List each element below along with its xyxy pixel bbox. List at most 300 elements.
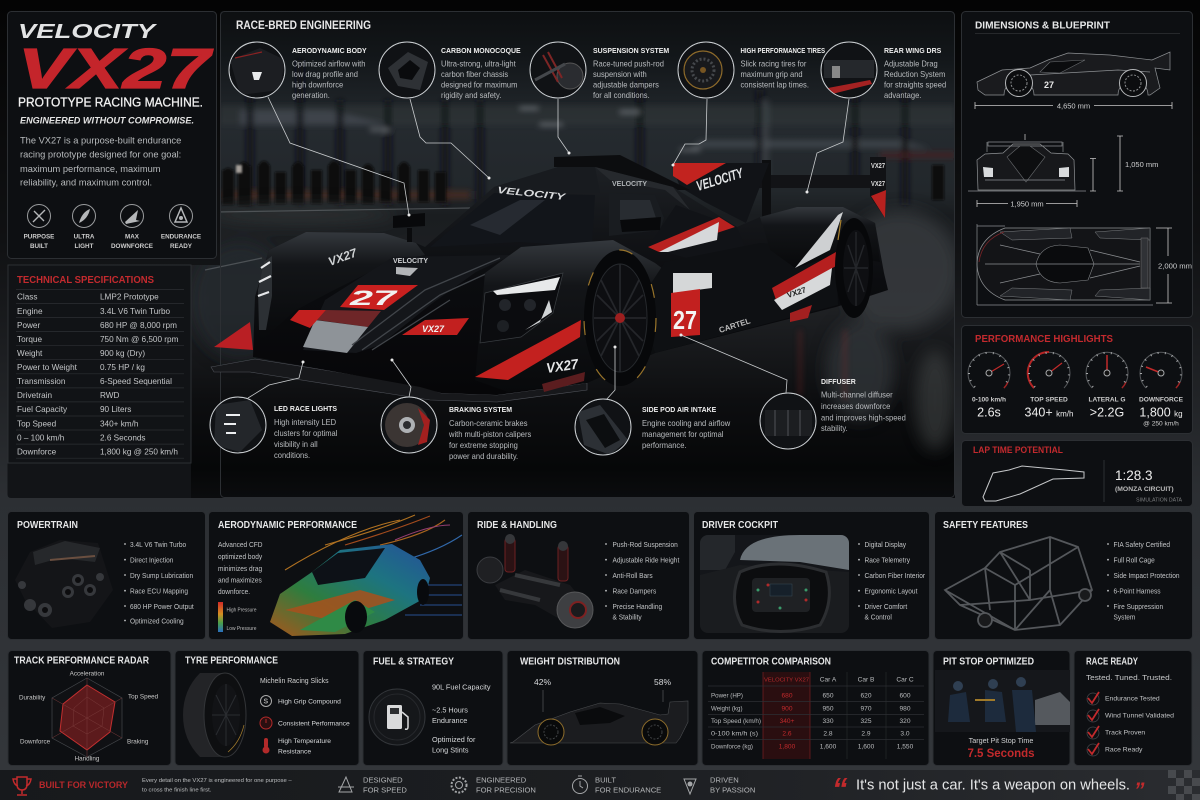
panel: driver cockpit	[694, 512, 930, 640]
radar chart: Acceleration	[70, 670, 105, 678]
spec table: RWD	[100, 391, 119, 400]
driven by passion	[684, 776, 755, 794]
comparison table: Downforce (kg)	[711, 744, 753, 750]
spec table: LMP2 Prototype	[100, 293, 159, 302]
description: maximum performance, maximum	[20, 164, 161, 174]
spec table: Power	[17, 321, 40, 330]
front red stripe	[475, 320, 581, 380]
comparison table: 330	[822, 718, 834, 725]
race car illustration: 27	[673, 305, 697, 335]
callout: carbon monocoque	[379, 42, 521, 100]
callout: high performance tires: consistent lap times.	[740, 80, 809, 90]
gauge: downforce: @ 250 km/h	[1143, 420, 1179, 428]
spec table: 1,800 kg @ 250 km/h	[100, 448, 178, 456]
spec table: Top Speed	[17, 419, 57, 428]
blueprint: side view: 27	[1044, 80, 1054, 90]
radar chart	[19, 670, 159, 762]
description: downforce.	[218, 589, 250, 596]
race car illustration: VELOCITY	[393, 258, 428, 265]
cockpit illustration	[700, 535, 849, 633]
spec table: 900 kg (Dry)	[100, 349, 145, 358]
icon: monocoque thumbnail	[379, 42, 435, 98]
subtitle: ENGINEERED WITHOUT COMPROMISE.	[20, 116, 194, 126]
checklist	[1087, 692, 1174, 756]
panel: driver cockpit: Digital Display	[864, 542, 907, 549]
race car illustration: VX27	[871, 163, 885, 170]
gauge: top speed: 340+ km/h	[1025, 406, 1073, 420]
tyre features	[260, 678, 350, 756]
built for endurance: FOR ENDURANCE	[595, 786, 661, 794]
callout: high performance tires: maximum grip and	[740, 70, 803, 79]
description: minimizes drag	[218, 566, 262, 573]
callout: braking system: Carbon-ceramic brakes	[449, 419, 528, 428]
gauge: top speed: TOP SPEED	[1030, 396, 1068, 404]
callout: suspension system: adjustable dampers	[593, 80, 659, 90]
race car illustration: VX27	[326, 245, 360, 269]
lap time: 1:28.3	[1115, 468, 1153, 483]
callout: carbon monocoque: rigidity and safety.	[441, 91, 501, 100]
front weight	[534, 677, 551, 712]
footer statement: Every detail on the VX27 is engineered for one purpose –	[142, 778, 292, 784]
built for endurance: BUILT	[595, 776, 616, 784]
race car illustration: VX27	[545, 356, 580, 376]
engineered for precision	[452, 776, 536, 794]
dimension: height	[1090, 136, 1158, 191]
comparison table: 340+	[780, 718, 795, 725]
callout: rear wing DRS	[821, 42, 946, 100]
panel: safety features: FIA Safety Certified	[1114, 542, 1170, 549]
rear weight	[654, 677, 671, 702]
callout: braking system	[381, 397, 531, 461]
footer bar	[0, 770, 1200, 800]
callout: side pod air intake: performance.	[642, 441, 687, 450]
panel: ride and handling: Precise Handling	[612, 604, 662, 611]
footer statement: to cross the finish line first.	[142, 788, 212, 794]
spec table: 0.75 HP / kg	[100, 363, 145, 372]
race car illustration: VX27	[422, 324, 445, 334]
callout: suspension system	[530, 42, 669, 100]
race car illustration: CARTEL	[718, 316, 752, 335]
built for endurance	[572, 776, 661, 794]
spec table: Class	[17, 293, 37, 302]
spec table: 750 Nm @ 6,500 rpm	[100, 335, 179, 344]
pit stop target: Target Pit Stop Time	[969, 736, 1033, 745]
comparison table: 1,550	[897, 744, 914, 750]
heading: SAFETY FEATURES	[943, 519, 1028, 531]
spec table: Downforce	[17, 448, 57, 456]
comparison table: Car B	[858, 676, 875, 684]
heading: COMPETITOR COMPARISON	[711, 656, 831, 668]
callout: diffuser	[760, 377, 906, 449]
spec table: 340+ km/h	[100, 419, 139, 428]
panel: track performance radar	[8, 650, 171, 766]
icon: purpose built	[24, 204, 54, 250]
callout: diffuser: DIFFUSER	[821, 377, 856, 386]
fuel text: ~2.5 Hours	[432, 706, 468, 714]
built for victory: BUILT FOR VICTORY	[39, 780, 129, 791]
comparison table: VELOCITY VX27	[764, 678, 809, 684]
front fender and side body	[475, 240, 687, 392]
model name: VX27	[18, 37, 213, 101]
comparison table: Car C	[896, 676, 914, 684]
callout: carbon monocoque: designed for maximum	[441, 80, 518, 90]
description	[20, 136, 181, 188]
rear wheel	[835, 218, 873, 318]
comparison table: 950	[822, 706, 834, 712]
roll cage illustration	[945, 537, 1092, 630]
comparison table: 970	[860, 706, 872, 712]
panel: driver cockpit: & Control	[864, 614, 892, 622]
heading: AERODYNAMIC PERFORMANCE	[218, 519, 357, 531]
rear wing	[751, 175, 870, 188]
checklist: Wind Tunnel Validated	[1105, 712, 1174, 720]
panel: ride and handling	[468, 512, 690, 640]
icon: trophy	[13, 777, 31, 795]
callout: aerodynamic body: Optimized airflow with	[292, 59, 365, 69]
race car illustration: VELOCITY	[612, 181, 647, 188]
track map	[983, 466, 1084, 501]
rear weight: 58%	[654, 677, 671, 687]
comparison table: Power (HP)	[711, 692, 743, 700]
brand name: VELOCITY	[18, 20, 158, 43]
quote	[832, 771, 1145, 800]
comparison table: 680	[781, 692, 793, 700]
heading: WEIGHT DISTRIBUTION	[520, 656, 620, 668]
lap time	[1115, 468, 1183, 504]
callout: braking system: for extreme stopping	[449, 441, 518, 450]
pit stop target: 7.5 Seconds	[967, 748, 1035, 760]
icon: purpose built: PURPOSE	[24, 234, 54, 240]
radar chart: Durability	[19, 694, 46, 702]
icon: max downforce: MAX	[125, 234, 140, 240]
callout: side pod air intake: management for optimal	[642, 430, 724, 439]
callout: side pod air intake	[575, 399, 730, 455]
callout: aerodynamic body: AERODYNAMIC BODY	[292, 46, 367, 55]
panel: technical specifications	[8, 265, 191, 498]
panel: driver cockpit: Race Telemetry	[864, 557, 910, 565]
panel: competitor comparison	[702, 650, 929, 766]
panel: brand introduction	[8, 12, 216, 258]
callout: aerodynamic body: generation.	[292, 91, 330, 100]
heading: TYRE PERFORMANCE	[185, 654, 278, 666]
heading: FUEL & STRATEGY	[373, 656, 454, 668]
tagline: PROTOTYPE RACING MACHINE.	[18, 96, 203, 110]
icon: purpose built: BUILT	[30, 243, 48, 250]
designed for speed: DESIGNED	[363, 776, 403, 784]
panel: powertrain	[8, 512, 206, 640]
heading: LAP TIME POTENTIAL	[973, 445, 1063, 455]
icon: ultra light	[72, 204, 96, 250]
description: reliability, and maximum control.	[20, 178, 152, 188]
comparison table: 3.0	[900, 730, 910, 738]
panel: safety features: Full Roll Cage	[1114, 557, 1155, 565]
bullet list	[1107, 543, 1109, 607]
callout: diffuser: and improves high-speed	[821, 413, 906, 423]
callout: LED race lights: conditions.	[274, 451, 310, 460]
panel: pit stop optimized	[933, 650, 1070, 766]
description: racing prototype designed for one goal:	[20, 150, 181, 160]
tyre features: High Grip Compound	[278, 698, 341, 706]
spec table: Transmission	[17, 377, 66, 386]
dimension: length	[975, 102, 1172, 110]
gauge: 0-100	[968, 352, 1010, 420]
icon: suspension thumbnail	[530, 42, 586, 98]
comparison table: 1,600	[820, 744, 837, 750]
CFD car	[270, 544, 430, 636]
spec table: 0 – 100 km/h	[17, 433, 65, 442]
comparison table: Weight (kg)	[711, 706, 743, 712]
designed for speed	[338, 776, 407, 794]
panel: driver cockpit: Ergonomic Layout	[864, 588, 917, 596]
engine illustration	[15, 540, 113, 628]
description: The VX27 is a purpose-built endurance	[20, 136, 181, 146]
heading: PIT STOP OPTIMIZED	[943, 656, 1034, 668]
driven by passion: DRIVEN	[710, 776, 739, 784]
spec table: Fuel Capacity	[17, 405, 68, 414]
spec table: Drivetrain	[17, 391, 52, 400]
panel: safety features	[934, 512, 1192, 640]
section heading: RACE-BRED ENGINEERING	[236, 20, 371, 32]
callout: LED race lights: visibility in all	[274, 440, 318, 449]
gauge: lateral g	[1086, 352, 1128, 420]
side number panel	[673, 273, 712, 293]
spec table: 3.4L V6 Twin Turbo	[100, 307, 171, 316]
bullet list	[605, 543, 607, 607]
panel: fuel and strategy	[363, 650, 503, 766]
icon: endurance ready: READY	[170, 243, 193, 250]
panel: tyre performance	[175, 650, 359, 766]
callout: aerodynamic body: low drag profile and	[292, 70, 358, 79]
checklist: Track Proven	[1105, 730, 1145, 736]
race car illustration: VX27	[786, 285, 808, 300]
panel: race ready	[1074, 650, 1192, 766]
radar chart: Top Speed	[128, 694, 159, 700]
lap time: (MONZA CIRCUIT)	[1115, 486, 1174, 493]
heading: POWERTRAIN	[17, 519, 78, 531]
nose	[303, 255, 512, 353]
panel: driver cockpit: Driver Comfort	[864, 604, 907, 611]
panel: dimensions and blueprint	[962, 12, 1192, 318]
callout: diffuser: increases downforce	[821, 402, 891, 411]
tyre features: S	[264, 698, 268, 706]
icon: aero thumbnail	[229, 42, 285, 98]
icon: headlight thumbnail	[210, 397, 266, 453]
designed for speed: FOR SPEED	[363, 786, 407, 794]
race car illustration	[211, 155, 888, 402]
checklist: Endurance Tested	[1105, 696, 1160, 702]
car body	[253, 167, 888, 395]
heading: PERFORMANCE HIGHLIGHTS	[975, 333, 1113, 345]
panel: safety features: Side Impact Protection	[1114, 573, 1180, 580]
heading: DRIVER COCKPIT	[702, 519, 778, 531]
fuel text	[432, 682, 491, 754]
callout: rear wing DRS: advantage.	[884, 91, 921, 100]
spec table: Weight	[17, 349, 43, 358]
icon: tire thumbnail	[678, 42, 734, 98]
front wheel	[584, 250, 656, 386]
blueprint: top view	[977, 224, 1153, 305]
engineered for precision: ENGINEERED	[476, 776, 527, 784]
suspension illustration	[477, 534, 593, 628]
checklist: Race Ready	[1105, 746, 1143, 754]
dimension: depth: 2,000 mm	[1158, 262, 1192, 270]
comparison table: 2.9	[861, 730, 871, 738]
panel: powertrain: 680 HP Power Output	[130, 604, 194, 611]
spec table: Power to Weight	[17, 363, 78, 372]
quote: It's not just a car. It's a weapon on wheels.	[856, 778, 1130, 794]
callout: high performance tires: HIGH PERFORMANCE TIRES	[740, 46, 825, 55]
footer statement	[142, 778, 292, 794]
callout: diffuser: stability.	[821, 424, 848, 433]
gauge: 0-100: 2.6s	[977, 406, 1001, 420]
radar chart: Downforce	[20, 738, 51, 746]
icon: brake disc thumbnail	[381, 397, 437, 453]
callout: carbon monocoque: CARBON MONOCOQUE	[441, 46, 521, 55]
icon: endurance ready	[161, 204, 201, 250]
callout: suspension system: SUSPENSION SYSTEM	[593, 46, 669, 55]
spec table: 6-Speed Sequential	[100, 377, 172, 386]
panel: safety features: 6-Point Harness	[1114, 588, 1161, 596]
panel: ride and handling: & Stability	[612, 614, 642, 622]
radar chart: Braking	[127, 738, 149, 746]
spec table: 2.6 Seconds	[100, 433, 146, 442]
comparison table: 320	[899, 718, 911, 725]
airflow streaks	[285, 515, 462, 615]
panel: safety features: System	[1114, 614, 1136, 622]
leader lines	[248, 97, 849, 400]
lap time: SIMULATION DATA	[1136, 498, 1183, 504]
icon: fuel pump	[369, 689, 425, 745]
icon: max downforce	[111, 204, 153, 250]
dimension: length: 4,650 mm	[1057, 102, 1090, 110]
callout: high performance tires	[678, 42, 825, 98]
race car illustration: 27	[348, 287, 399, 310]
driven by passion: BY PASSION	[710, 786, 755, 794]
pit crew illustration	[935, 670, 1070, 732]
bullet list	[124, 543, 126, 621]
callout: rear wing DRS: Adjustable Drag	[884, 59, 938, 69]
dimension: width	[977, 200, 1077, 208]
panel: powertrain: Race ECU Mapping	[130, 588, 188, 596]
heading: RACE READY	[1086, 656, 1138, 668]
description: Advanced CFD	[218, 542, 263, 549]
panel: powertrain: 3.4L V6 Twin Turbo	[130, 542, 186, 549]
cabin stripe	[648, 217, 735, 252]
panel: powertrain: Direct Injection	[130, 557, 174, 565]
comparison table: 900	[781, 706, 793, 712]
callout: aerodynamic body	[229, 42, 367, 100]
spec table: Engine	[17, 307, 43, 316]
spec table	[16, 290, 184, 458]
front weight: 42%	[534, 677, 551, 687]
comparison table: Car A	[820, 676, 837, 684]
callout: high performance tires: Slick racing tires for	[740, 59, 807, 69]
race car illustration: VX27	[871, 181, 885, 188]
panel: driver cockpit: Carbon Fiber Interior	[864, 573, 926, 580]
panel: ride and handling: Adjustable Ride Height	[612, 557, 679, 565]
tyre illustration	[183, 673, 246, 757]
spec table: Torque	[17, 335, 42, 344]
icon: diffuser thumbnail	[760, 393, 816, 449]
gauge: downforce: 1,800 kg	[1139, 406, 1183, 420]
icon: ultra light: LIGHT	[75, 243, 94, 250]
tyre features: Resistance	[278, 748, 311, 756]
callout: LED race lights: LED RACE LIGHTS	[274, 404, 337, 413]
comparison table: 1,800	[779, 744, 796, 750]
comparison table: 0-100 km/h (s)	[711, 730, 758, 738]
panel: safety features: Fire Suppression	[1114, 604, 1163, 611]
pit stop target	[967, 736, 1035, 760]
callout: braking system: power and durability.	[449, 452, 518, 461]
callout: carbon monocoque: carbon fiber chassis	[441, 70, 508, 79]
panel: ride and handling: Push-Rod Suspension	[612, 542, 678, 549]
heading: RIDE & HANDLING	[477, 519, 557, 531]
icon: endurance ready: ENDURANCE	[161, 234, 201, 240]
panel: performance highlights	[962, 326, 1192, 434]
checker flag pattern	[1168, 770, 1200, 800]
icon: ultra light: ULTRA	[74, 234, 95, 240]
bullet list	[858, 543, 860, 607]
race car illustration: VELOCITY	[694, 164, 746, 194]
panel: ride and handling: Race Dampers	[612, 588, 657, 596]
fuel text: Long Stints	[432, 746, 469, 754]
strapline: Tested. Tuned. Trusted.	[1086, 673, 1172, 682]
blueprint: front view	[968, 134, 1086, 191]
dimension: depth	[1156, 228, 1192, 303]
pressure legend: Low Pressure	[226, 626, 257, 632]
comparison table: Top Speed (km/h)	[711, 718, 761, 725]
icon: rear wing thumbnail	[821, 42, 877, 98]
callout: suspension system: Race-tuned push-rod	[593, 59, 664, 69]
gauge: top speed	[1025, 352, 1073, 420]
callout: rear wing DRS: REAR WING DRS	[884, 46, 941, 55]
callout: diffuser: Multi-channel diffuser	[821, 390, 893, 400]
spec table: 680 HP @ 8,000 rpm	[100, 321, 177, 330]
description	[218, 542, 263, 596]
icon: side pod thumbnail	[575, 399, 631, 455]
callout: rear wing DRS: for straights speed	[884, 80, 946, 90]
car side view	[510, 701, 688, 745]
front wing	[214, 322, 253, 350]
panel: hero race-bred engineering	[190, 11, 960, 498]
callout: side pod air intake: SIDE POD AIR INTAKE	[642, 405, 716, 414]
fuel text: Endurance	[432, 716, 467, 725]
heading: TECHNICAL SPECIFICATIONS	[17, 274, 154, 286]
callout: braking system: BRAKING SYSTEM	[449, 405, 512, 414]
comparison table: 620	[860, 692, 872, 700]
comparison table: 325	[860, 718, 872, 725]
heading: DIMENSIONS & BLUEPRINT	[975, 20, 1111, 32]
panel: powertrain: Dry Sump Lubrication	[130, 573, 193, 580]
fuel text: 90L Fuel Capacity	[432, 682, 491, 692]
tyre features: High Temperature	[278, 738, 331, 745]
callout: LED race lights: High intensity LED	[274, 418, 336, 427]
gauge: 0-100: 0-100 km/h	[972, 396, 1006, 404]
panel: ride and handling: Anti-Roll Bars	[612, 573, 653, 580]
pressure legend	[218, 602, 257, 632]
panel: lap time potential	[962, 440, 1192, 506]
comparison table: 600	[899, 692, 911, 700]
callout: LED race lights	[210, 397, 338, 460]
fuel text: Optimized for	[432, 735, 476, 744]
windshield and cabin	[430, 193, 595, 247]
engineered for precision: FOR PRECISION	[476, 786, 536, 794]
mirrors	[393, 213, 425, 228]
callout: side pod air intake: Engine cooling and airflow	[642, 419, 730, 428]
description: and maximizes	[218, 577, 262, 585]
comparison table: 2.8	[823, 730, 833, 738]
pressure legend: High Pressure	[226, 608, 257, 614]
